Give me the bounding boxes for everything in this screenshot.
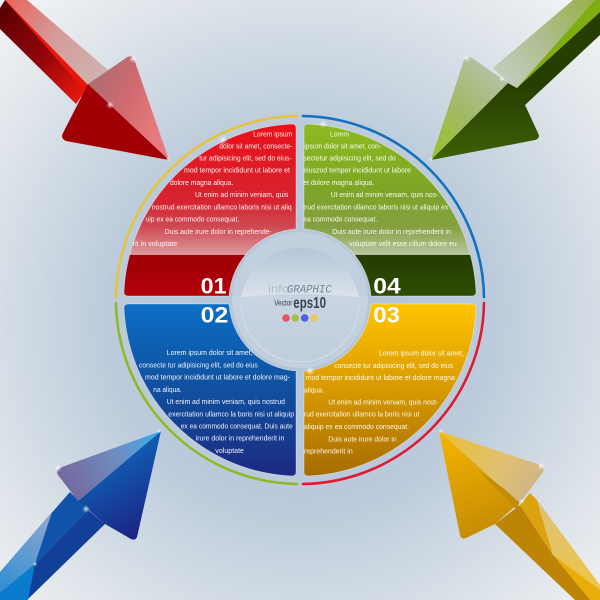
text block 02: Ut enim ad minim veniam, quis nostrud [167, 397, 285, 406]
text block 04: voluptate velit esse cillum dolore eu [349, 239, 457, 248]
panel 03: yellow [304, 302, 476, 476]
hub title emphasis: GRAPHIC [287, 285, 332, 297]
text block 03: mod tempor incididunt ut labore et dolore magna [306, 373, 456, 382]
panel 04: green [303, 124, 476, 298]
arrow: yellow, bottom right [439, 431, 600, 600]
text block 02: na aliqua. [153, 385, 182, 394]
sparkle highlights [32, 54, 545, 566]
colour dots [282, 314, 318, 322]
text block 02: ex ea commodo consequat. Duis aute [181, 422, 293, 431]
text block 04: et dolore magna aliqua. [303, 178, 374, 187]
number 04: 04 [373, 273, 402, 298]
text block 01: tur adipisicing elit, sed do eius- [199, 154, 292, 163]
number 01: 01 [201, 273, 227, 298]
text block 04: ipsum dolor sit amet, con- [304, 141, 381, 150]
text block 01 [133, 129, 293, 248]
text block 03: reprehenderit in [304, 446, 353, 455]
arrow: blue, bottom left [0, 431, 161, 600]
panel 01: red [124, 124, 296, 298]
text block 04: Ut enim ad minim veniam, quis nos- [331, 190, 439, 199]
text block 01: dolore magna aliqua. [170, 178, 233, 187]
number 03: 03 [373, 302, 400, 327]
number 02: 02 [201, 302, 228, 327]
text block 04: eiuszod tempor incididunt ut labore [303, 166, 411, 175]
text block 04: sectetur adipisicing elit, sed do [303, 154, 396, 163]
arrow: red, top left [0, 0, 169, 160]
text block 02: voluptate [215, 446, 244, 455]
outer ring [116, 116, 484, 484]
text block 03: rud exercitation ullamco la boris nisi ut [304, 410, 420, 419]
text block 02: mod tempor incididunt ut labore et dolore mag- [145, 373, 290, 382]
panel 02: blue [124, 302, 296, 476]
text block 01: rit in voluptate [133, 239, 177, 248]
text block 02: consecte tur adipisicing elit, sed do eius [139, 360, 258, 369]
vector label: Vector [274, 298, 293, 307]
text block 03: Lorem ipsum dolor sit amet, [379, 349, 464, 358]
central hub [232, 232, 368, 368]
text block 01: Duis aute irure dolor in reprehende- [165, 227, 272, 236]
text block 04: Lorem [330, 129, 349, 138]
arrow: green, top right [431, 0, 600, 160]
text block 01: Lorem ipsum [253, 129, 292, 138]
eps10 label: eps10 [293, 295, 326, 312]
hub lower half [232, 296, 368, 364]
text block 01: nostrud exercitation ullamco laboris nisi ut aliq [152, 202, 292, 211]
text block 04 [303, 129, 457, 248]
hub lens highlight [241, 248, 359, 297]
text block 01: Ut enim ad minim veniam, quis [195, 190, 288, 199]
hub title: info [268, 284, 289, 296]
text block 02 [139, 348, 294, 455]
text block 01: uip ex ea commodo consequat. [146, 215, 239, 224]
text block 04: Duis aute irure dolor in reprehenderit in [332, 227, 451, 236]
text block 01: mod tempor incididunt ut labore et [184, 166, 291, 175]
text block 02: irure dolor in reprehenderit in [196, 434, 284, 443]
text block 03: aliquip ex ea commodo consequat. [304, 422, 409, 431]
text block 04: trud exercitation ullamco laboris nisi ut aliquip ex [303, 202, 448, 211]
text block 03: Duis aute irure dolor in [328, 434, 397, 443]
text block 03: consecte tur adipisicing elit, sed do eius [334, 361, 453, 370]
text block 04: ea commodo consequat. [303, 215, 377, 224]
text block 03: Ut enim ad minim veniam, quis nost- [328, 398, 439, 407]
text block 03: aliqua. [304, 385, 324, 394]
text block 02: exercitation ullamco la boris nisi ut aliquip [168, 409, 294, 418]
text block 01: dolor sit amet, consecte- [219, 141, 293, 150]
text block 02: Lorem ipsum dolor sit amet, [167, 348, 253, 357]
text block 03 [304, 349, 464, 455]
